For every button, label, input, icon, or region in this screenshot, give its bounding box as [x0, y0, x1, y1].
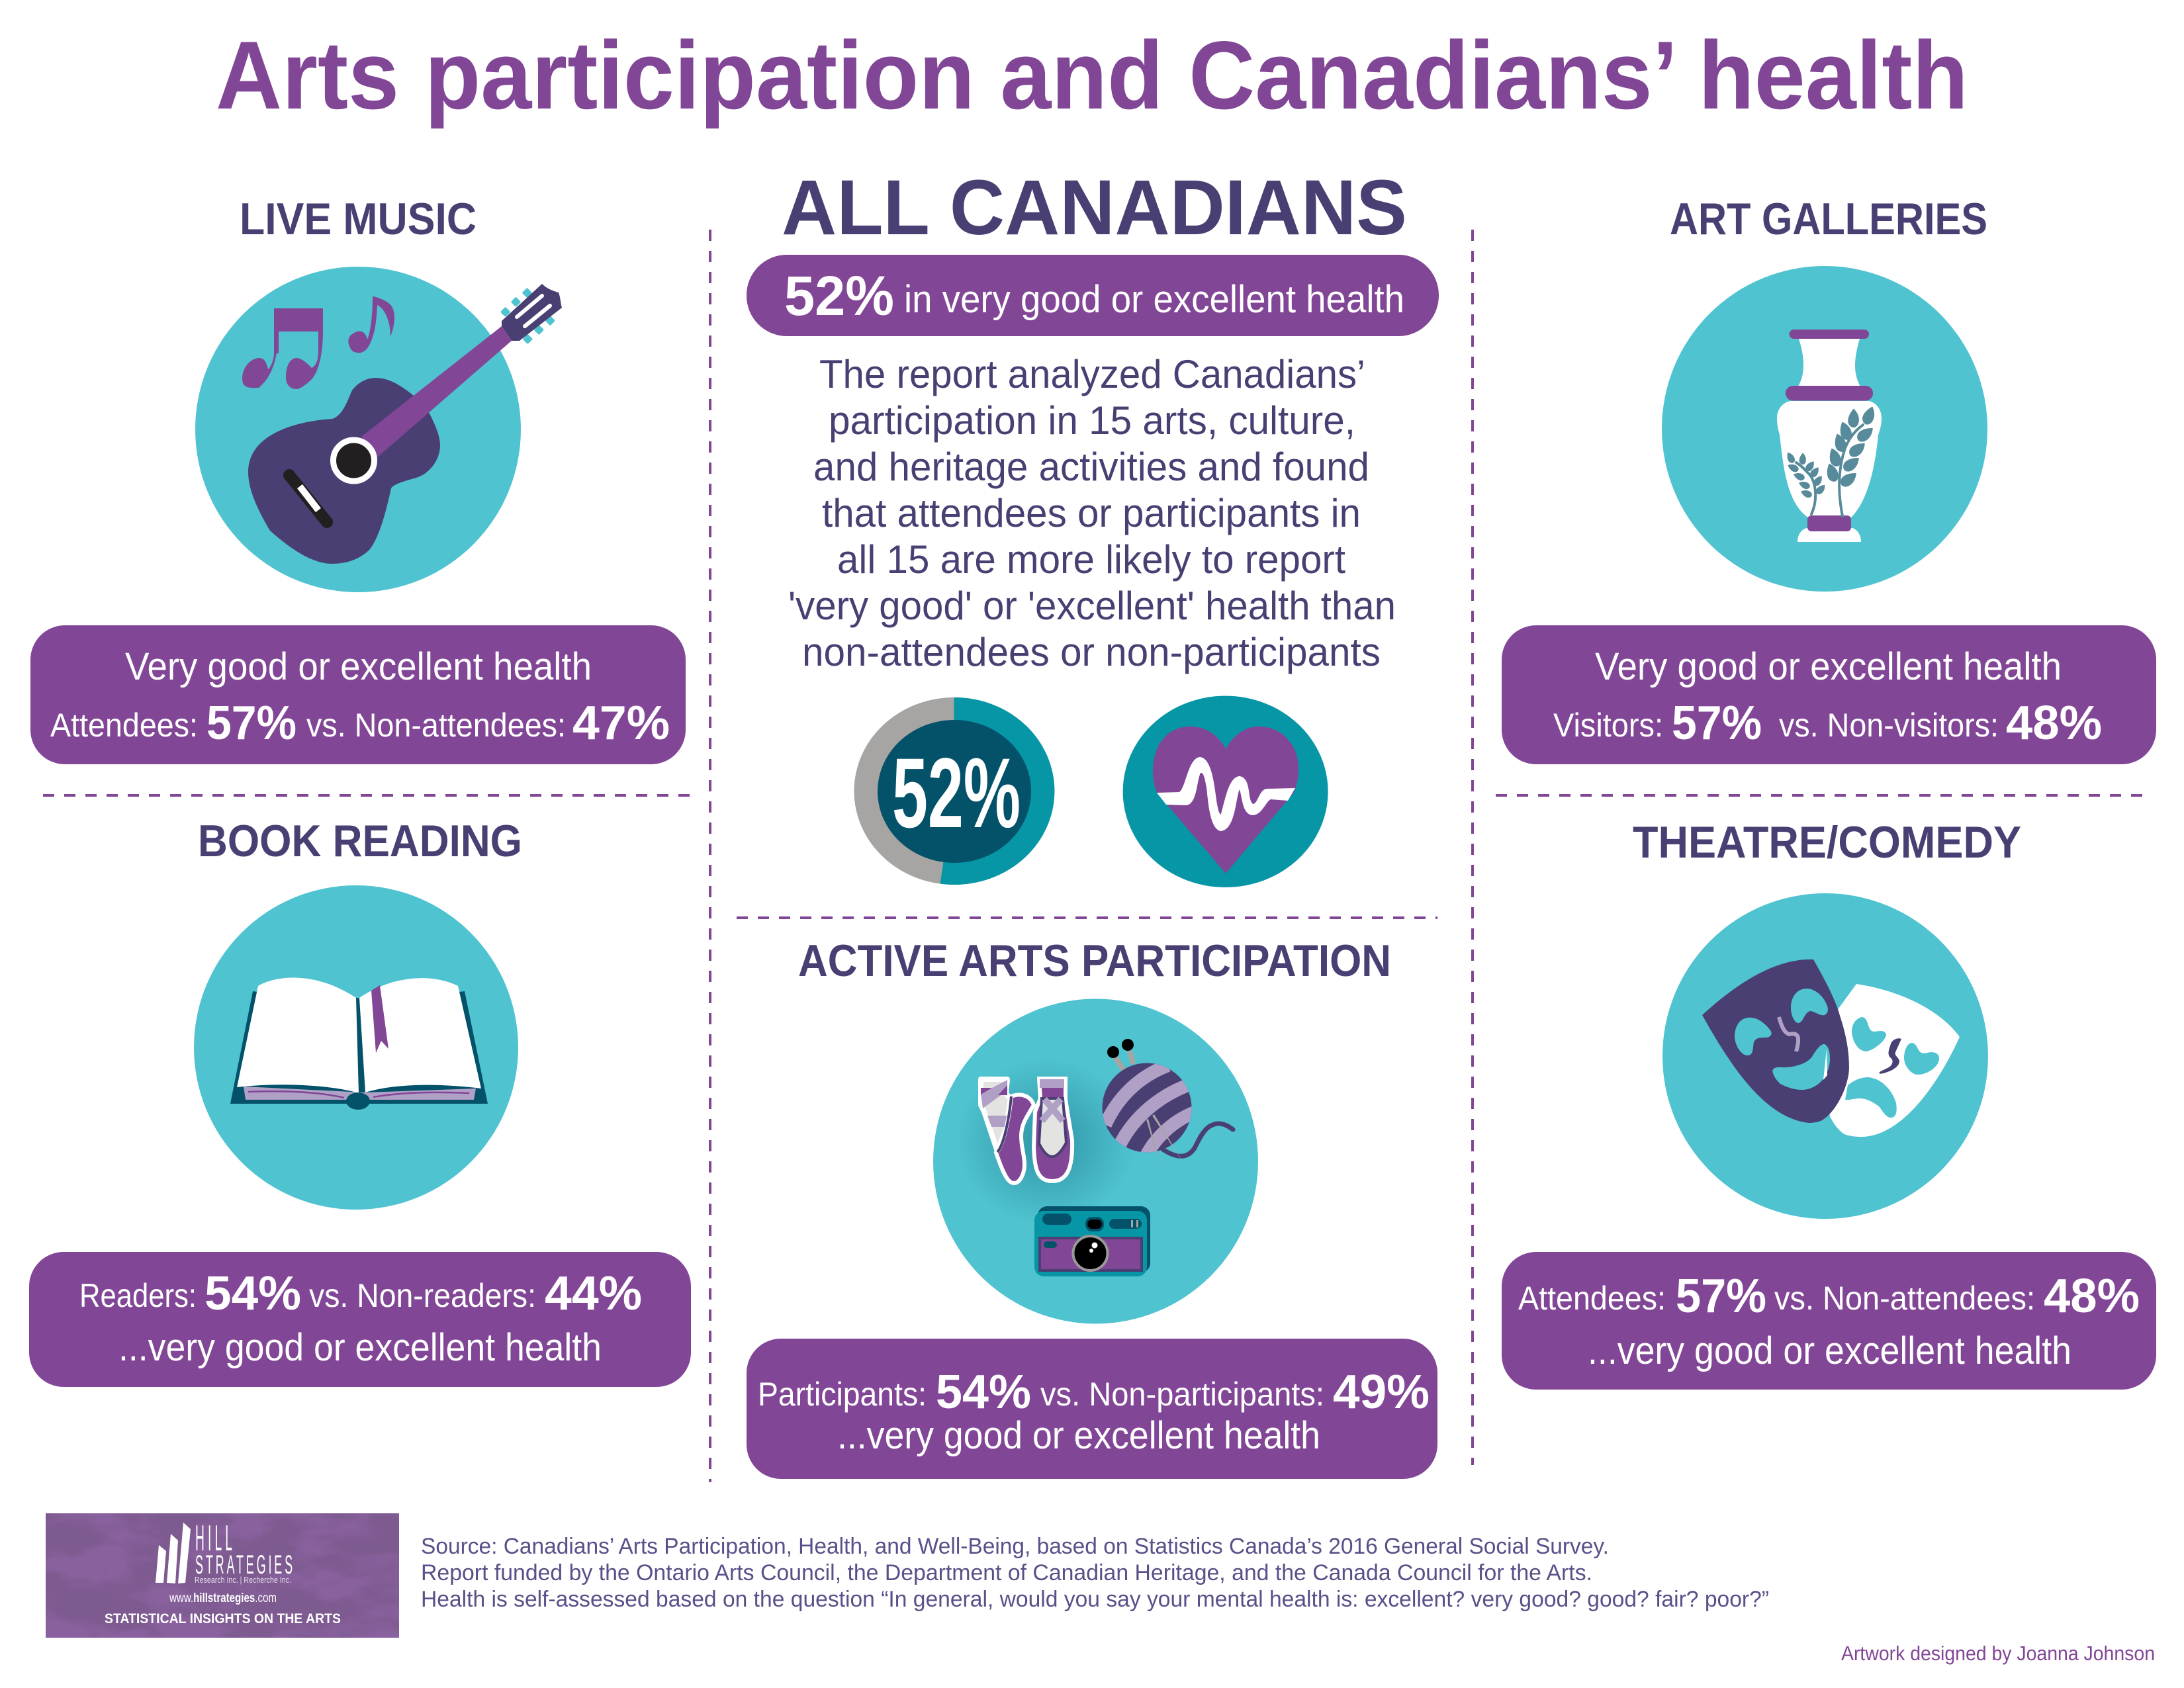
panel: art galleries statistics [1502, 625, 2156, 764]
text block: report summary: and heritage activities and found [813, 445, 1369, 489]
text block: source notes [421, 1534, 1769, 1612]
icon: heart with pulse [1123, 696, 1328, 887]
callout: 52 percent in very good or excellent health: 52% [784, 265, 894, 327]
chart: 52 percent donut [854, 697, 1054, 885]
callout: 52 percent in very good or excellent health [747, 255, 1439, 336]
panel: active arts statistics: 54% [936, 1366, 1031, 1419]
panel: book reading statistics: Readers: [79, 1277, 197, 1314]
heading: active arts participation: ACTIVE ARTS PARTICIPATION [798, 936, 1391, 986]
panel: art galleries statistics: 48% [2006, 697, 2102, 750]
text block: report summary: participation in 15 arts, culture, [829, 398, 1355, 443]
icon: ballet shoes, yarn and camera [933, 999, 1258, 1323]
icon: vase [1662, 266, 1987, 592]
left ballet shoe [981, 1079, 1034, 1183]
credit: artwork designer: Artwork designed by Joanna Johnson [1841, 1642, 2155, 1665]
yarn ball with needles [1103, 1039, 1233, 1168]
logo: Hill Strategies banner: STATISTICAL INSIGHTS ON THE ARTS [105, 1611, 341, 1626]
right ballet shoe [1034, 1079, 1072, 1181]
logo: Hill Strategies banner [46, 1513, 399, 1638]
icon: open book [194, 885, 518, 1210]
text block: source notes: Report funded by the Ontario Arts Council, the Department of Canadian Heritage, and the Canada Council for the Arts. [421, 1560, 1592, 1585]
icon: guitar and music notes [195, 267, 562, 592]
panel: live music statistics: Attendees: [50, 707, 198, 744]
logo: Hill Strategies banner: Research Inc. | Recherche Inc. [195, 1575, 291, 1585]
chart: 52 percent donut: 52% [892, 737, 1021, 848]
heading: book reading: BOOK READING [198, 816, 522, 866]
text block: report summary: 'very good' or 'excellent' health than [788, 584, 1396, 628]
text block: report summary [788, 352, 1396, 674]
text block: report summary: all 15 are more likely to report [837, 537, 1345, 582]
panel: live music statistics: vs. Non-attendees: [306, 707, 566, 744]
panel: active arts statistics [747, 1339, 1437, 1479]
logo: Hill Strategies banner: www.hillstrategies.com [169, 1591, 277, 1605]
panel: active arts statistics: vs. Non-participants: [1040, 1376, 1324, 1413]
panel: theatre and comedy statistics: Attendees: [1518, 1280, 1666, 1317]
panel: book reading statistics: 54% [205, 1267, 301, 1320]
panel: art galleries statistics: Very good or excellent health [1595, 645, 2062, 688]
panel: theatre and comedy statistics: 48% [2044, 1270, 2140, 1323]
panel: theatre and comedy statistics: vs. Non-attendees: [1774, 1280, 2035, 1317]
logo: Hill Strategies banner: HILL [195, 1518, 232, 1558]
panel: theatre and comedy statistics [1502, 1252, 2156, 1390]
panel: theatre and comedy statistics: ...very good or excellent health [1588, 1329, 2071, 1372]
panel: live music statistics [30, 625, 686, 764]
panel: live music statistics: Very good or excellent health [125, 645, 592, 688]
heading: theatre and comedy: THEATRE/COMEDY [1633, 817, 2021, 867]
panel: active arts statistics: 49% [1333, 1366, 1430, 1419]
text block: report summary: non-attendees or non-participants [802, 630, 1381, 674]
text block: source notes: Health is self-assessed based on the question “In general, would you say your mental health is: excellent? very good? good? fair? poor?” [421, 1587, 1769, 1612]
panel: theatre and comedy statistics: 57% [1676, 1270, 1766, 1323]
text block: report summary: that attendees or participants in [822, 491, 1361, 535]
text block: report summary: The report analyzed Canadians’ [819, 352, 1365, 396]
panel: live music statistics: 57% [206, 697, 296, 750]
camera [1034, 1206, 1150, 1276]
panel: book reading statistics: ...very good or excellent health [118, 1326, 602, 1369]
heading: all canadians: ALL CANADIANS [782, 164, 1407, 251]
heading: art galleries: ART GALLERIES [1670, 194, 1987, 244]
panel: active arts statistics: Participants: [758, 1376, 927, 1413]
panel: active arts statistics: ...very good or excellent health [837, 1414, 1320, 1457]
callout: 52 percent in very good or excellent health: in very good or excellent health [904, 278, 1404, 321]
panel: book reading statistics: 44% [545, 1267, 642, 1320]
panel: art galleries statistics: 57% [1672, 697, 1762, 750]
heading: live music: LIVE MUSIC [240, 194, 477, 244]
icon: theatre masks [1662, 893, 1988, 1219]
panel: art galleries statistics: Visitors: [1553, 707, 1663, 744]
panel: art galleries statistics: vs. Non-visitors: [1779, 707, 1999, 744]
panel: book reading statistics: vs. Non-readers: [309, 1277, 536, 1314]
panel: live music statistics: 47% [572, 697, 670, 750]
title: Arts participation and Canadians’ health [216, 21, 1968, 129]
panel: book reading statistics [29, 1252, 691, 1387]
text block: source notes: Source: Canadians’ Arts Participation, Health, and Well-Being, based on Statistics Canada’s 2016 General Social Survey. [421, 1534, 1609, 1559]
logo: Hill Strategies banner: STRATEGIES [195, 1550, 293, 1579]
